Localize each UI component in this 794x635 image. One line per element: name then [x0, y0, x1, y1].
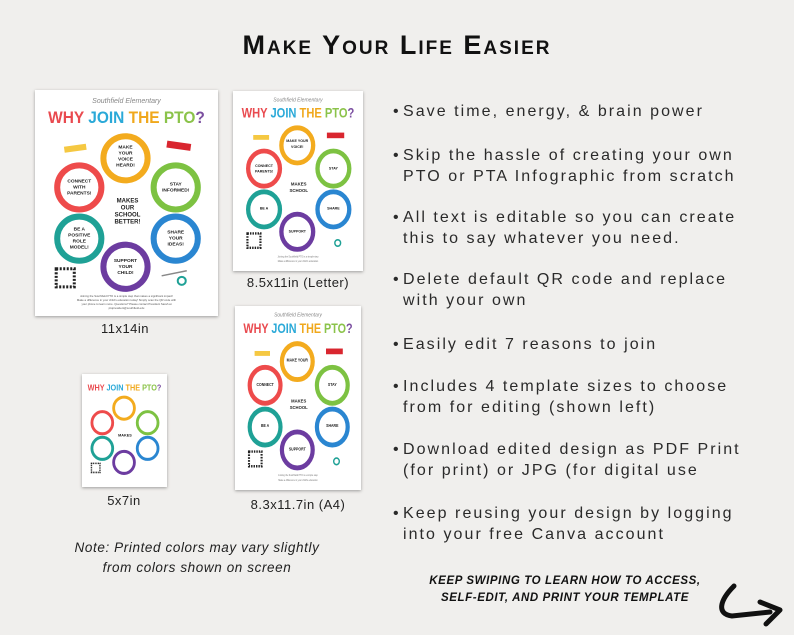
flyer: 11x14: MAKES: [117, 198, 138, 204]
callout: keep swiping: KEEP SWIPING TO LEARN HOW TO ACCESS,: [429, 575, 701, 587]
callout: keep swiping: [429, 575, 701, 604]
flyer: 11x14: MODEL!: [70, 245, 89, 251]
bullet 3: this to say whatever you need.: [403, 230, 681, 246]
flyer: letter: Southfield Elementary: [273, 97, 323, 103]
flyer: 11x14: VOICE: [118, 156, 134, 162]
flyer: 11x14: CHILD!: [117, 270, 134, 276]
label: 11x14: 11x14in: [101, 321, 149, 336]
flyer: A4: STAY: [328, 383, 337, 387]
flyer: letter: SUPPORT: [289, 229, 307, 234]
flyer: A4: SUPPORT: [289, 448, 306, 452]
bullet 2: Skip the hassle of creating your own: [403, 147, 734, 164]
note: [74, 540, 320, 575]
flyer: A4: SHARE: [326, 424, 339, 428]
flyer: 11x14: INFORMED!: [162, 187, 190, 193]
bullet 4: [393, 271, 727, 308]
flyer: 11x14: OUR: [121, 206, 135, 212]
flyer: letter: Make a difference in your child's education: [278, 260, 319, 263]
flyer: 11x14: STAY: [170, 181, 183, 187]
flyer: 11x14: Joining the Southfield PTO is a simple step that makes a significant impact!: [80, 294, 173, 298]
bullet 2: •: [393, 147, 401, 164]
bullet 3: [393, 209, 736, 246]
note: Note: Printed colors may vary slightly: [75, 540, 319, 555]
flyer: letter: MAKE YOUR: [286, 139, 308, 143]
flyer: 11x14: Southfield Elementary: [92, 98, 161, 105]
bullet 2: [393, 147, 736, 184]
bullet 7: [393, 441, 741, 478]
bullet 3: •: [393, 209, 401, 226]
flyer: letter: MAKES: [291, 181, 307, 186]
flyer: 11x14: HEARD!: [116, 162, 135, 168]
flyer: 5x7: MAKES: [118, 432, 132, 437]
flyer: 5x7: [82, 374, 167, 487]
flyer: 11x14: WITH: [73, 184, 86, 190]
flyer: letter: VOICE!: [291, 145, 303, 149]
bullet 6: •: [393, 378, 401, 395]
arrow: [719, 584, 782, 626]
flyer: 11x14: ROLE: [73, 239, 87, 245]
flyer: 11x14: BETTER!: [114, 220, 141, 226]
bullet 6: [393, 378, 728, 416]
bullet 3: All text is editable so you can create: [403, 209, 736, 226]
flyer: 11x14: BE A: [74, 227, 85, 233]
flyer: letter: CONNECT: [255, 164, 274, 168]
flyer: 11x14: YOUR: [119, 150, 133, 156]
flyer: A4: SCHOOL: [290, 405, 308, 410]
flyer: A4: MAKES: [291, 398, 306, 404]
flyer: A4: BE A: [261, 424, 269, 428]
flyer: 11x14: PARENTS!: [67, 190, 92, 196]
flyer: 11x14: YOUR: [169, 236, 183, 242]
flyer: 11x14: YOUR: [119, 264, 133, 270]
bullet 1: Save time, energy, & brain power: [403, 103, 704, 120]
bullet 7: Download edited design as PDF Print: [403, 441, 741, 458]
note: from colors shown on screen: [103, 560, 291, 575]
bullet 5: Easily edit 7 reasons to join: [403, 336, 657, 353]
label: A4: 8.3x11.7in (A4): [251, 497, 345, 512]
flyer: letter: BE A: [260, 206, 269, 210]
flyer: letter: Joining the Southfield PTO is a simple step: [278, 255, 319, 258]
flyer: 5x7: WHY JOIN THE PTO?: [88, 383, 161, 393]
flyer: 11x14: POSITIVE: [68, 233, 91, 239]
callout: keep swiping: SELF-EDIT, AND PRINT YOUR TEMPLATE: [441, 592, 689, 604]
flyer: letter: STAY: [329, 166, 338, 170]
flyer: letter: [233, 91, 363, 271]
bullet 7: (for print) or JPG (for digital use: [403, 462, 699, 478]
flyer: A4: CONNECT: [256, 383, 274, 387]
flyer: A4: Joining the Southfield PTO is a simple step: [278, 474, 319, 477]
flyer: 11x14: your phone to learn more. Questions? Please contact President Sarah at: [81, 302, 172, 306]
flyer: A4: Southfield Elementary: [274, 312, 322, 319]
bullet 8: •: [393, 505, 401, 522]
bullet 8: into your free Canva account: [403, 526, 665, 542]
bullet 2: PTO or PTA Infographic from scratch: [403, 168, 736, 184]
flyer: 11x14: SCHOOL: [115, 213, 141, 219]
flyer: 11x14: CONNECT: [67, 178, 91, 184]
label: 5x7: 5x7in: [107, 493, 141, 508]
bullet 5: •: [393, 336, 401, 353]
bullet 6: Includes 4 template sizes to choose: [403, 378, 728, 395]
flyer: letter: WHY JOIN THE PTO?: [242, 105, 354, 121]
bullet 4: •: [393, 271, 401, 288]
bullet 4: with your own: [403, 292, 527, 308]
bullet 6: from for editing (shown left): [403, 398, 656, 416]
flyer: 11x14: [35, 90, 218, 316]
label: letter: 8.5x11in (Letter): [247, 275, 349, 290]
flyer: A4: MAKE YOUR: [287, 358, 308, 363]
flyer: 11x14: WHY JOIN THE PTO?: [48, 108, 205, 127]
flyer: A4: Make a difference in your child's education: [278, 479, 318, 482]
flyer: letter: PARENTS!: [255, 169, 273, 174]
flyer: 11x14: SUPPORT: [114, 258, 137, 264]
bullet 1: •: [393, 103, 401, 120]
bullet 8: [393, 505, 734, 542]
flyer: 11x14: Make a difference in your child's education today! Simply scan the QR code with: [77, 298, 177, 302]
flyer: 11x14: ptopresident@southfield.edu: [109, 306, 145, 310]
flyer: letter: SHARE: [327, 206, 340, 210]
bullet 8: Keep reusing your design by logging: [403, 505, 734, 522]
flyer: A4: [235, 306, 361, 490]
flyer: letter: SCHOOL: [289, 188, 308, 193]
flyer: A4: WHY JOIN THE PTO?: [243, 320, 353, 336]
flyer: 11x14: MAKE: [118, 144, 133, 150]
flyer: 11x14: IDEAS!: [168, 242, 184, 248]
flyer: 11x14: SHARE: [167, 230, 185, 236]
title: Make Your Life Easier: [242, 30, 551, 60]
bullet 7: •: [393, 441, 401, 458]
bullet 4: Delete default QR code and replace: [403, 271, 727, 288]
